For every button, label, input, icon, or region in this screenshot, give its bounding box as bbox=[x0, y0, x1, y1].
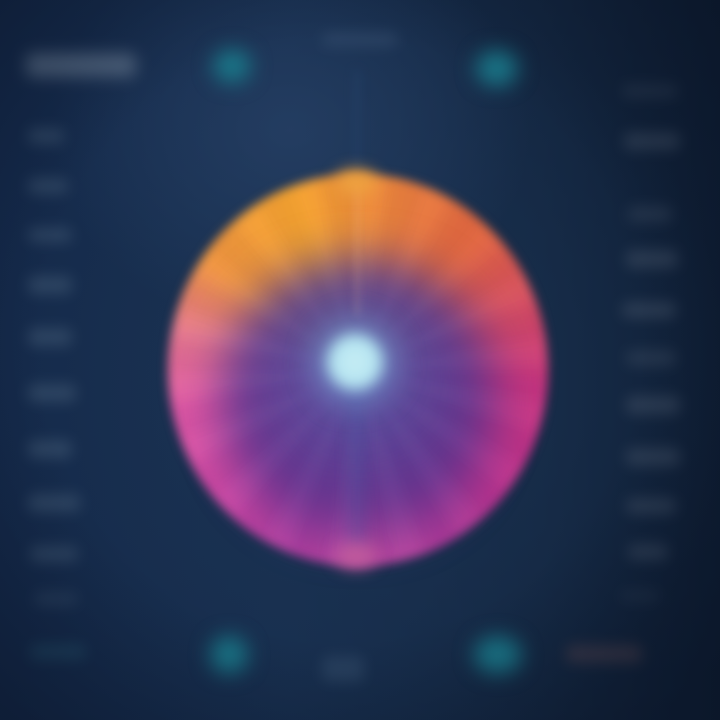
wheel: spoke texture bbox=[168, 174, 548, 566]
radial wheel chart bbox=[160, 158, 556, 580]
wheel: upper seam bbox=[355, 186, 359, 316]
icon: top left teal marker bbox=[213, 49, 251, 83]
wheel: bottom peak bbox=[336, 544, 376, 568]
vertical axis line above wheel bbox=[354, 70, 360, 175]
wheel: glowing core bbox=[327, 334, 383, 390]
heading: top centre label bbox=[322, 33, 398, 46]
icon: bottom left teal marker bbox=[210, 636, 248, 674]
heading: top left title bbox=[26, 53, 136, 77]
text block: bottom centre label bbox=[322, 656, 364, 682]
wheel: inner purple field bbox=[220, 256, 496, 540]
icon: bottom right teal marker bbox=[474, 636, 522, 674]
wheel: lower spoke bbox=[352, 392, 362, 552]
wheel: centre halo bbox=[311, 318, 399, 406]
icon: top right teal marker bbox=[476, 50, 518, 86]
wheel: top peak bbox=[336, 170, 376, 194]
wheel: coloured disc bbox=[168, 174, 548, 566]
